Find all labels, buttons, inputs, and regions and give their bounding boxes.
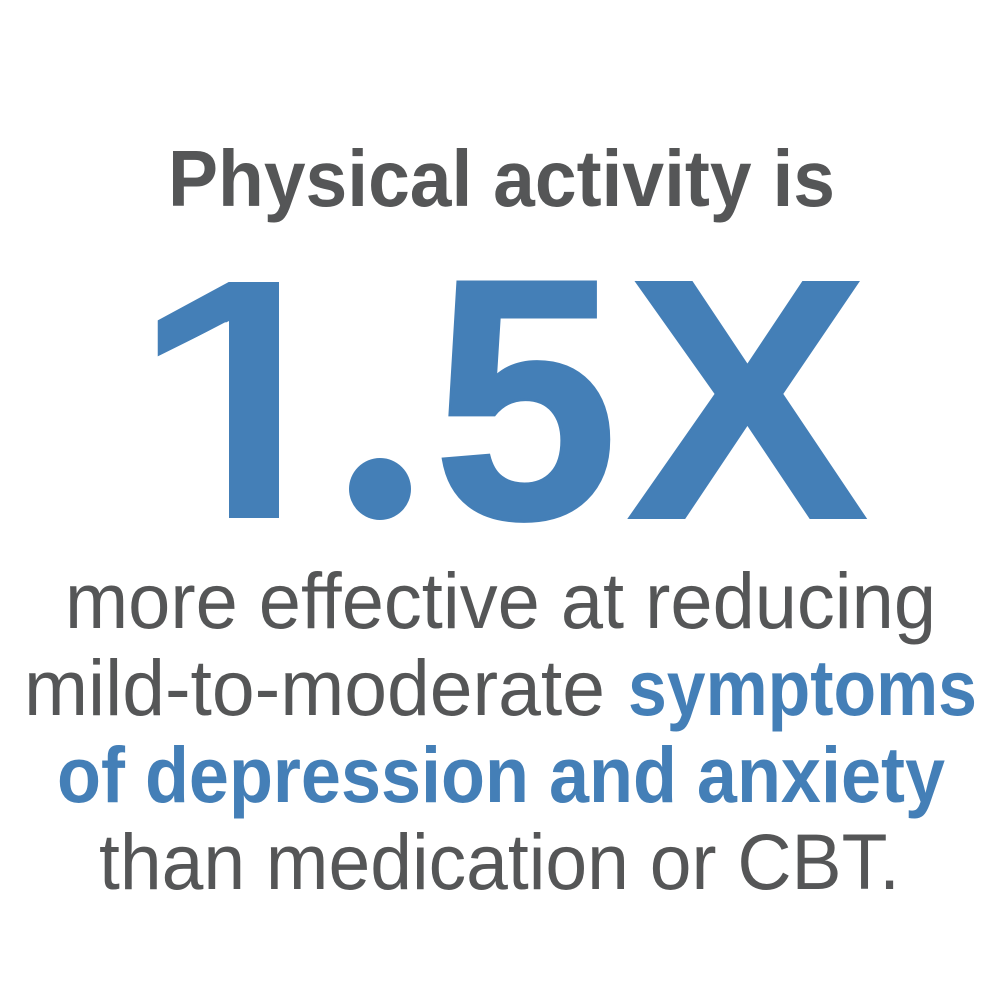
big statistic: 1.5X	[158, 280, 868, 523]
big statistic: 1.5X: .	[316, 104, 445, 621]
big statistic: 1.5X: X	[626, 207, 870, 591]
body line 2: mild-to-moderate	[24, 643, 605, 732]
body line 1: more effective at reducing	[65, 556, 936, 645]
big statistic: 1.5X: 1	[130, 208, 359, 591]
big statistic: 1.5X: 5	[433, 207, 618, 591]
heading: Physical activity is: Physical activity is	[168, 134, 835, 223]
body line 2	[24, 643, 977, 732]
infographic canvas	[29, 148, 974, 890]
body line 4: than medication or CBT.	[99, 817, 900, 906]
